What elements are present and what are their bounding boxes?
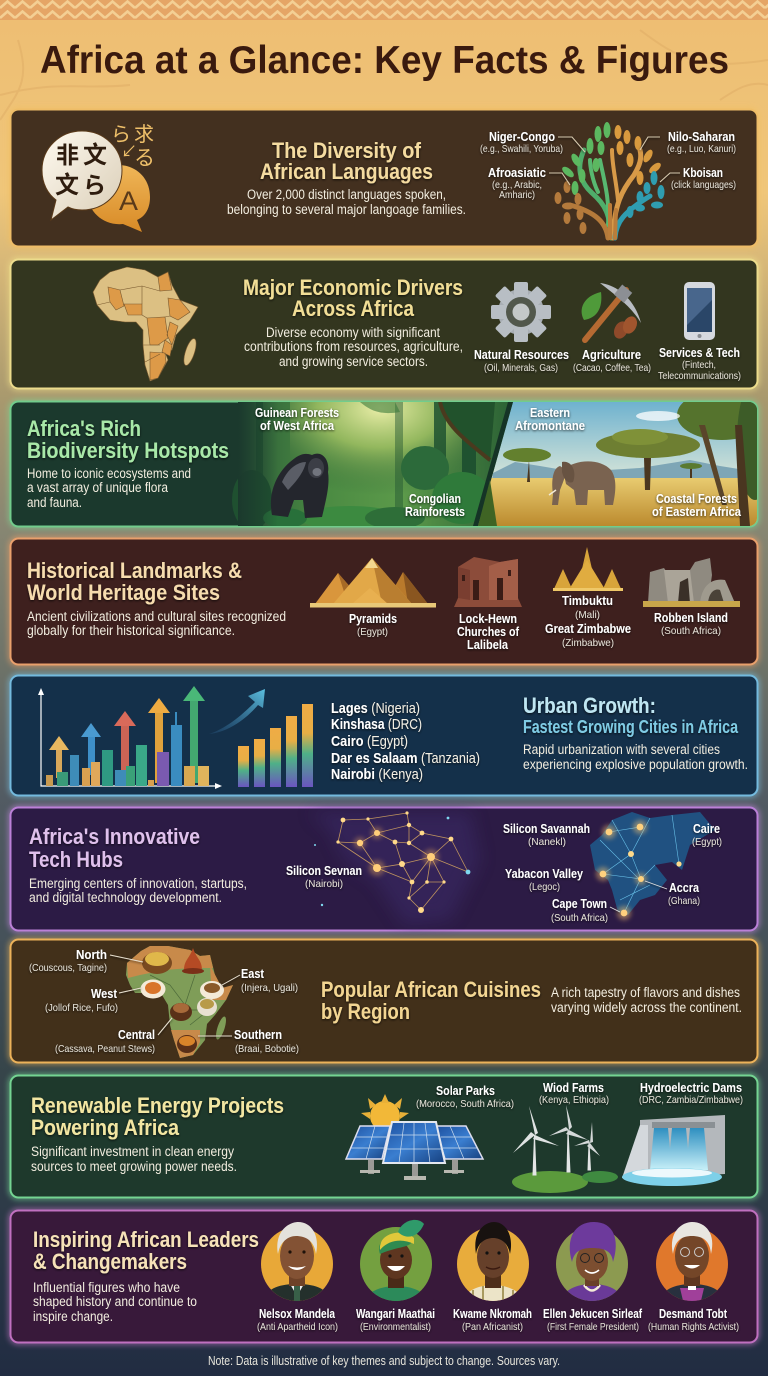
panel: cuisines xyxy=(10,940,758,1062)
text: renewable energy xyxy=(31,1144,237,1174)
chart: bars xyxy=(238,704,313,787)
icon: wind turbines xyxy=(512,1105,618,1193)
labels: tech hubs: Accra xyxy=(669,881,700,895)
heading: biodiversity: Africa's Rich xyxy=(27,416,141,441)
labels: language families: Afroasiatic xyxy=(488,166,546,180)
labels: tech hubs: (Legoc) xyxy=(529,881,560,893)
labels: tech hubs: (Ghana) xyxy=(668,895,700,907)
icon: smartphone xyxy=(684,282,715,340)
heading: renewable energy xyxy=(31,1093,284,1140)
heading: leaders: Inspiring African Leaders xyxy=(33,1227,259,1252)
labels: economic drivers: Telecommunications) xyxy=(658,370,741,382)
labels: cuisines: (Couscous, Tagine) xyxy=(29,962,107,974)
labels: leaders: (Human Rights Activist) xyxy=(648,1321,739,1333)
panel: leaders xyxy=(10,1210,758,1342)
panel: landmarks xyxy=(10,538,758,664)
text: economic drivers: contributions from resources, agriculture, xyxy=(244,339,463,354)
heading: urban growth xyxy=(523,693,739,737)
heading: biodiversity xyxy=(27,416,229,463)
labels: language families: (click languages) xyxy=(671,179,736,191)
text: biodiversity: a vast array of unique flora xyxy=(27,480,168,495)
text: leaders xyxy=(33,1280,197,1324)
labels: landmarks: (Zimbabwe) xyxy=(562,637,614,649)
heading: tech hubs xyxy=(29,824,200,872)
chart: growth arrows over skyline xyxy=(38,686,265,789)
title: Africa at a Glance: Key Facts & Figures xyxy=(40,39,729,82)
labels: cuisines: West xyxy=(91,987,118,1001)
labels: renewable energy: (Kenya, Ethiopia) xyxy=(539,1094,609,1106)
labels: cuisines: East xyxy=(241,967,265,981)
gorilla xyxy=(271,454,329,518)
icon: stone ruins xyxy=(643,558,740,607)
labels: leaders xyxy=(257,1307,739,1333)
panel: languages xyxy=(10,110,758,246)
icon: speech bubbles: 求 xyxy=(134,123,154,146)
heading: economic drivers: Across Africa xyxy=(292,296,415,321)
icons: dishes xyxy=(140,948,224,1053)
heading: renewable energy: Powering Africa xyxy=(31,1115,180,1140)
labels: leaders: (Anti Apartheid Icon) xyxy=(257,1321,338,1333)
labels: leaders: (First Female President) xyxy=(547,1321,639,1333)
labels: tech hubs: Silicon Sevnan xyxy=(286,864,362,878)
labels: hotspots: Rainforests xyxy=(405,505,465,519)
panel: economic drivers xyxy=(10,260,758,388)
labels: renewable energy: Hydroelectric Dams xyxy=(640,1081,742,1095)
heading: languages: The Diversity of xyxy=(272,138,422,163)
icon: speech bubbles: 文 xyxy=(83,141,107,169)
heading: languages: African Languages xyxy=(260,159,433,184)
labels: cuisines: North xyxy=(76,948,107,962)
labels: economic drivers xyxy=(474,346,741,382)
icon: Timbuktu mosque xyxy=(553,547,623,591)
heading: leaders: & Changemakers xyxy=(33,1249,187,1274)
labels: cuisines: (Injera, Ugali) xyxy=(241,982,298,994)
labels: language families: Kboisan xyxy=(683,166,723,180)
text: languages: belonging to several major langoage families. xyxy=(227,202,466,217)
icon: speech bubbles: A xyxy=(119,186,138,216)
labels: hotspots: Coastal Forests xyxy=(656,492,737,506)
text: tech hubs xyxy=(29,876,247,905)
labels: tech hubs: Yabacon Valley xyxy=(505,867,583,881)
labels: language families: Nilo-Saharan xyxy=(668,130,735,144)
text: landmarks xyxy=(27,609,286,638)
labels: language families: Niger-Congo xyxy=(489,130,555,144)
heading: tech hubs: Tech Hubs xyxy=(29,847,123,872)
text: languages: Over 2,000 distinct languages spoken, xyxy=(247,187,446,202)
labels: economic drivers: (Fintech, xyxy=(682,359,716,371)
portrait: Mandela xyxy=(261,1222,333,1305)
text: biodiversity xyxy=(27,466,191,510)
text: biodiversity: and fauna. xyxy=(27,495,82,510)
labels: leaders: Ellen Jekucen Sirleaf xyxy=(543,1307,643,1321)
labels: leaders: Wangari Maathai xyxy=(356,1307,435,1321)
labels: tech hubs: (Egypt) xyxy=(692,836,722,848)
heading: economic drivers xyxy=(243,275,463,321)
labels: landmarks: Great Zimbabwe xyxy=(545,622,631,636)
text: urban growth xyxy=(523,742,748,772)
labels: cuisines xyxy=(29,948,299,1055)
labels: economic drivers: Agriculture xyxy=(582,348,641,362)
list: cities: Lages (Nigeria) xyxy=(331,700,420,717)
text: leaders: inspire change. xyxy=(33,1309,113,1324)
labels: leaders: (Environmentalist) xyxy=(360,1321,431,1333)
heading: economic drivers: Major Economic Drivers xyxy=(243,275,463,300)
text: leaders: shaped history and continue to xyxy=(33,1294,197,1309)
labels: tech hubs: Silicon Savannah xyxy=(503,822,590,836)
labels: cuisines: (Braai, Bobotie) xyxy=(235,1043,299,1055)
heading: urban growth: Urban Growth: xyxy=(523,693,656,718)
elephant xyxy=(549,461,615,505)
icon: speech bubbles xyxy=(42,123,155,232)
panel: biodiversity xyxy=(6,397,762,532)
text: tech hubs: Emerging centers of innovation, startups, xyxy=(29,876,247,891)
icon: gear xyxy=(491,282,551,342)
labels: landmarks: Lalibela xyxy=(467,638,509,652)
labels: landmarks: Robben Island xyxy=(654,611,728,625)
illustration: forest and savanna xyxy=(232,402,757,526)
network map: blue continent xyxy=(590,812,715,920)
icon: rock-hewn church xyxy=(454,557,522,607)
text: economic drivers: and growing service sectors. xyxy=(279,354,428,369)
labels: cuisines: (Jollof Rice, Fufo) xyxy=(45,1002,118,1014)
icon: speech bubbles: ↙ xyxy=(121,144,137,161)
labels: landmarks: Pyramids xyxy=(349,612,397,626)
portrait: Tutu xyxy=(656,1222,728,1305)
labels: language families: Amharic) xyxy=(499,189,535,201)
icon: speech bubbles: ら xyxy=(111,124,131,146)
portrait: Nkrumah xyxy=(457,1222,529,1305)
labels: tech hubs: (South Africa) xyxy=(551,912,608,924)
text: renewable energy: sources to meet growing power needs. xyxy=(31,1159,237,1174)
heading: cuisines: Popular African Cuisines xyxy=(321,977,541,1002)
labels: cuisines: (Cassava, Peanut Stews) xyxy=(55,1043,155,1055)
decorative chevron band xyxy=(0,0,768,20)
labels: cuisines: Southern xyxy=(234,1028,282,1042)
heading: landmarks: Historical Landmarks & xyxy=(27,558,242,583)
text: urban growth: Rapid urbanization with several cities xyxy=(523,742,720,757)
heading: leaders xyxy=(33,1227,259,1274)
list: cities: Cairo (Egypt) xyxy=(331,733,408,750)
text: landmarks: globally for their historical significance. xyxy=(27,623,235,638)
labels: economic drivers: (Oil, Minerals, Gas) xyxy=(484,362,558,374)
labels: renewable energy: (DRC, Zambia/Zimbabwe) xyxy=(639,1094,743,1106)
text: cuisines: varying widely across the continent. xyxy=(551,1000,742,1015)
text: cuisines: A rich tapestry of flavors and dishes xyxy=(551,985,740,1000)
network map: golden hubs xyxy=(310,811,480,925)
labels: leaders: (Pan Africanist) xyxy=(462,1321,523,1333)
text: renewable energy: Significant investment in clean energy xyxy=(31,1144,234,1159)
labels: hotspots xyxy=(255,406,742,519)
text: landmarks: Ancient civilizations and cultural sites recognized xyxy=(27,609,286,624)
heading: landmarks xyxy=(27,558,242,605)
labels: hotspots: Eastern xyxy=(530,406,570,420)
labels: hotspots: of Eastern Africa xyxy=(652,505,742,519)
labels: hotspots: of West Africa xyxy=(260,419,335,433)
panel: urban growth xyxy=(10,676,758,796)
heading: cuisines xyxy=(321,977,541,1024)
labels: renewable energy: Solar Parks xyxy=(436,1084,495,1098)
labels: landmarks: (Egypt) xyxy=(357,626,388,638)
heading: languages xyxy=(260,138,433,184)
acacia trees xyxy=(503,402,757,526)
labels: landmarks: Churches of xyxy=(457,625,520,639)
labels: landmarks: (Mali) xyxy=(575,609,600,621)
icon: solar panels xyxy=(346,1094,483,1180)
labels: leaders: Nelsox Mandela xyxy=(259,1307,336,1321)
labels: tech hubs: Caire xyxy=(693,822,720,836)
text: languages xyxy=(227,187,466,217)
map: Africa economy xyxy=(93,267,199,381)
text: economic drivers xyxy=(244,325,463,369)
heading: cuisines: by Region xyxy=(321,999,410,1024)
icon: speech bubbles: 非 xyxy=(56,142,79,168)
text: tech hubs: and digital technology development. xyxy=(29,890,222,905)
labels: landmarks: (South Africa) xyxy=(661,625,721,637)
labels: cuisines: Central xyxy=(118,1028,155,1042)
labels: hotspots: Afromontane xyxy=(515,419,585,433)
list: cities: Nairobi (Kenya) xyxy=(331,766,423,783)
labels: landmarks: Lock-Hewn xyxy=(459,612,517,626)
text: biodiversity: Home to iconic ecosystems and xyxy=(27,466,191,481)
labels: language families xyxy=(480,130,736,201)
labels: leaders: Kwame Nkromah xyxy=(453,1307,532,1321)
labels: language families: (e.g., Swahili, Yoruba) xyxy=(480,143,563,155)
labels: language families: (e.g., Luo, Kanuri) xyxy=(667,143,736,155)
text: economic drivers: Diverse economy with significant xyxy=(266,325,440,340)
labels: economic drivers: Natural Resources xyxy=(474,348,569,362)
text: urban growth: experiencing explosive population growth. xyxy=(523,757,748,772)
heading: renewable energy: Renewable Energy Projects xyxy=(31,1093,284,1118)
list: cities: Dar es Salaam (Tanzania) xyxy=(331,750,480,767)
labels: landmarks: Timbuktu xyxy=(562,594,613,608)
icon: language tree xyxy=(554,122,664,238)
labels: hotspots: Guinean Forests xyxy=(255,406,339,420)
labels: renewable energy xyxy=(416,1081,743,1110)
icon: speech bubbles: る xyxy=(134,147,155,170)
text: cuisines xyxy=(551,985,742,1015)
labels: landmarks xyxy=(349,594,728,652)
icon: speech bubbles: ら xyxy=(83,172,106,198)
labels: tech hubs: (Nanekl) xyxy=(528,836,566,848)
heading: biodiversity: Biodiversity Hotspots xyxy=(27,438,229,463)
portrait: Maathai xyxy=(360,1220,432,1305)
labels: tech hubs xyxy=(286,822,722,924)
icon: pickaxe and beans xyxy=(582,283,641,341)
icon: speech bubbles: 文 xyxy=(55,171,79,199)
list: cities xyxy=(331,700,480,783)
labels: renewable energy: Wiod Farms xyxy=(543,1081,604,1095)
labels: tech hubs: Cape Town xyxy=(552,897,607,911)
text: leaders: Influential figures who have xyxy=(33,1280,180,1295)
icon: pyramids xyxy=(310,558,436,608)
heading: landmarks: World Heritage Sites xyxy=(27,580,220,605)
list: cities: Kinshasa (DRC) xyxy=(331,716,422,733)
icon: hydroelectric dam xyxy=(622,1115,725,1186)
labels: economic drivers: Services & Tech xyxy=(659,346,740,360)
labels: renewable energy: (Morocco, South Africa) xyxy=(416,1098,514,1110)
map: cuisines of Africa xyxy=(126,946,233,1058)
panel: renewable energy xyxy=(10,1076,758,1198)
portrait: Sirleaf xyxy=(556,1222,628,1305)
labels: language families: (e.g., Arabic, xyxy=(492,179,542,191)
labels: tech hubs: (Nairobi) xyxy=(305,878,343,890)
labels: hotspots: Congolian xyxy=(409,492,461,506)
heading: tech hubs: Africa's Innovative xyxy=(29,824,200,849)
footnote: Note: Data is illustrative of key themes and subject to change. Sources vary. xyxy=(208,1354,560,1368)
labels: leaders: Desmand Tobt xyxy=(659,1307,728,1321)
panel: tech hubs xyxy=(10,808,758,930)
labels: economic drivers: (Cacao, Coffee, Tea) xyxy=(573,362,651,374)
